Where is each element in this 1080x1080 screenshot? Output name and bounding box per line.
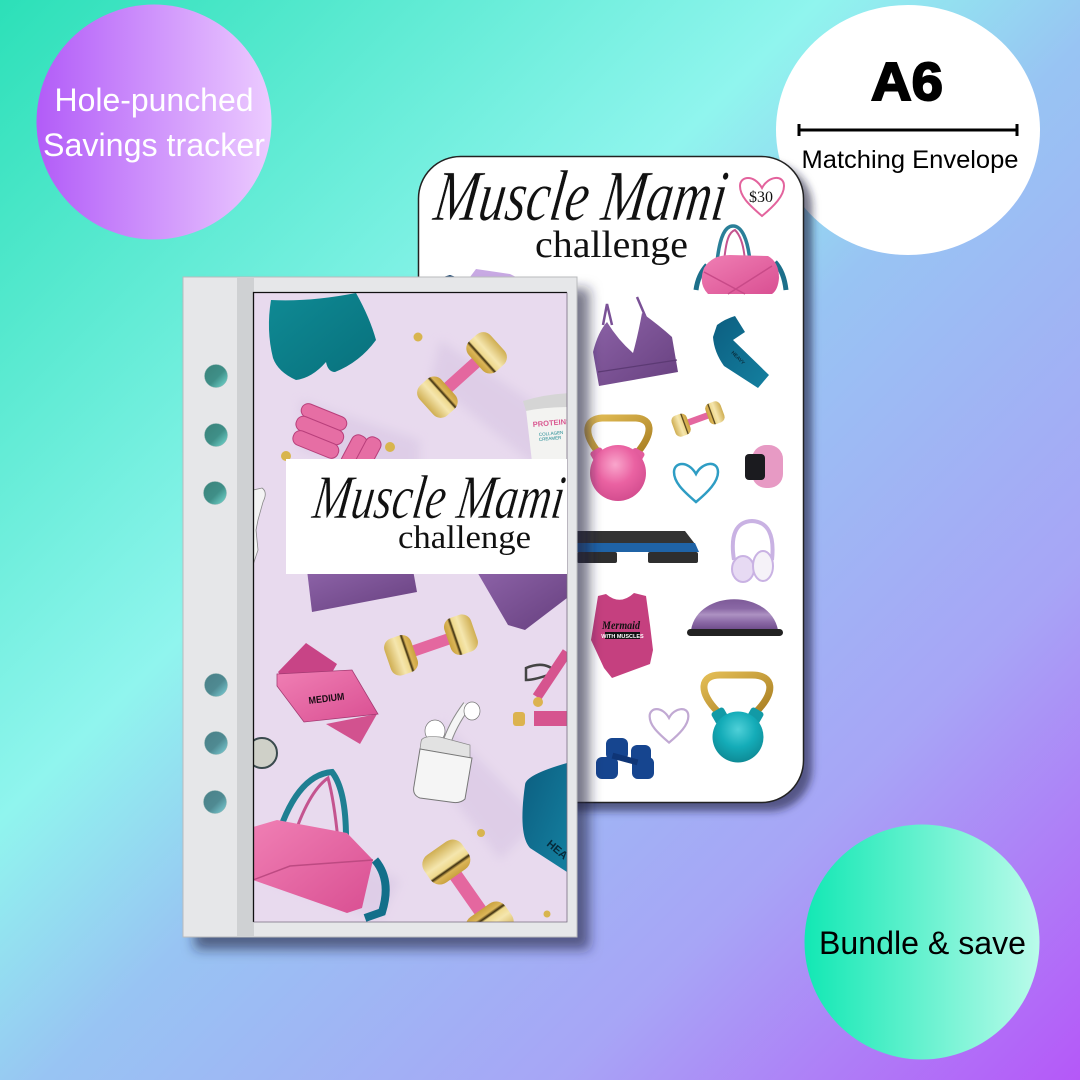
badge: hole-punched savings tracker: Hole-punched [54,82,254,118]
airpods [414,702,480,803]
sticker: teal kettlebell [704,675,770,762]
pattern border [254,292,567,922]
sticker: pink gym bag [696,226,786,294]
cable and jump rope [513,652,568,726]
sticker: headphones [732,521,773,582]
badge: hole-punched savings tracker [36,4,272,240]
earbuds at left edge [253,488,265,565]
pattern insert: HEA [544,838,570,862]
protein jar: COLLAGEN [539,430,564,437]
icon: price heart [740,178,784,216]
sticker: pink tank top [591,593,653,678]
sticker: teal resistance band: HEAVY [730,350,746,367]
badge: bundle and save: Bundle & save [819,925,1026,961]
gold glitter dots [281,332,550,918]
badge: A6 matching envelope [776,5,1040,255]
badge: hole-punched savings tracker: Savings tracker [43,127,265,163]
brush strokes [338,348,532,912]
pattern insert [247,292,571,951]
sticker: small dumbbell [670,400,726,438]
purple bag [476,570,567,630]
panel: sticker sheet back card [418,156,804,802]
purple top [307,570,417,612]
teal band [522,763,567,872]
badge: A6 matching envelope: A6 [871,52,943,112]
sticker: purple sports bra [593,297,678,386]
silver disc [254,737,278,769]
sticker: teal resistance band [713,316,769,388]
envelope base [183,277,577,937]
sticker: pink tank top: Mermaid [601,618,641,632]
sticker: lilac heart [650,709,688,743]
sticker: balance dome [687,599,783,636]
label on front card [286,459,570,574]
sticker: blue dumbbells [596,738,654,779]
label on front card: Muscle Mami [308,463,570,532]
sticker: aerobic step [577,531,699,563]
sheet title: Muscle Mami [429,156,733,236]
icon: price heart: $30 [749,189,773,206]
pink band medium: MEDIUM [308,692,345,707]
sheet title: challenge [535,224,688,266]
dumbbell cut off at the bottom [422,840,514,922]
panel: front envelope card [183,277,577,951]
sticker: blue heart [674,464,718,502]
label on front card: challenge [398,520,531,556]
pink band medium [277,643,378,744]
sticker: pink kettlebell [588,418,649,501]
ankle weights [292,403,382,459]
shorts [269,293,376,380]
punched holes [204,364,228,814]
badge: bundle and save [804,824,1040,1060]
gym bag [253,772,386,918]
envelope fold strip [237,277,254,937]
sheet title [429,156,733,266]
sticker: peeking items above the front card [443,269,516,277]
sticker: smart watch [745,445,783,488]
sticker: pink tank top: WITH MUSCLES [601,634,644,640]
protein jar [523,393,567,459]
protein jar: CREAMER [539,435,562,442]
dumbbell [417,332,507,418]
badge: A6 matching envelope: Matching Envelope [802,146,1018,174]
protein jar: PROTEINS [532,417,571,429]
dumbbell [384,614,478,676]
